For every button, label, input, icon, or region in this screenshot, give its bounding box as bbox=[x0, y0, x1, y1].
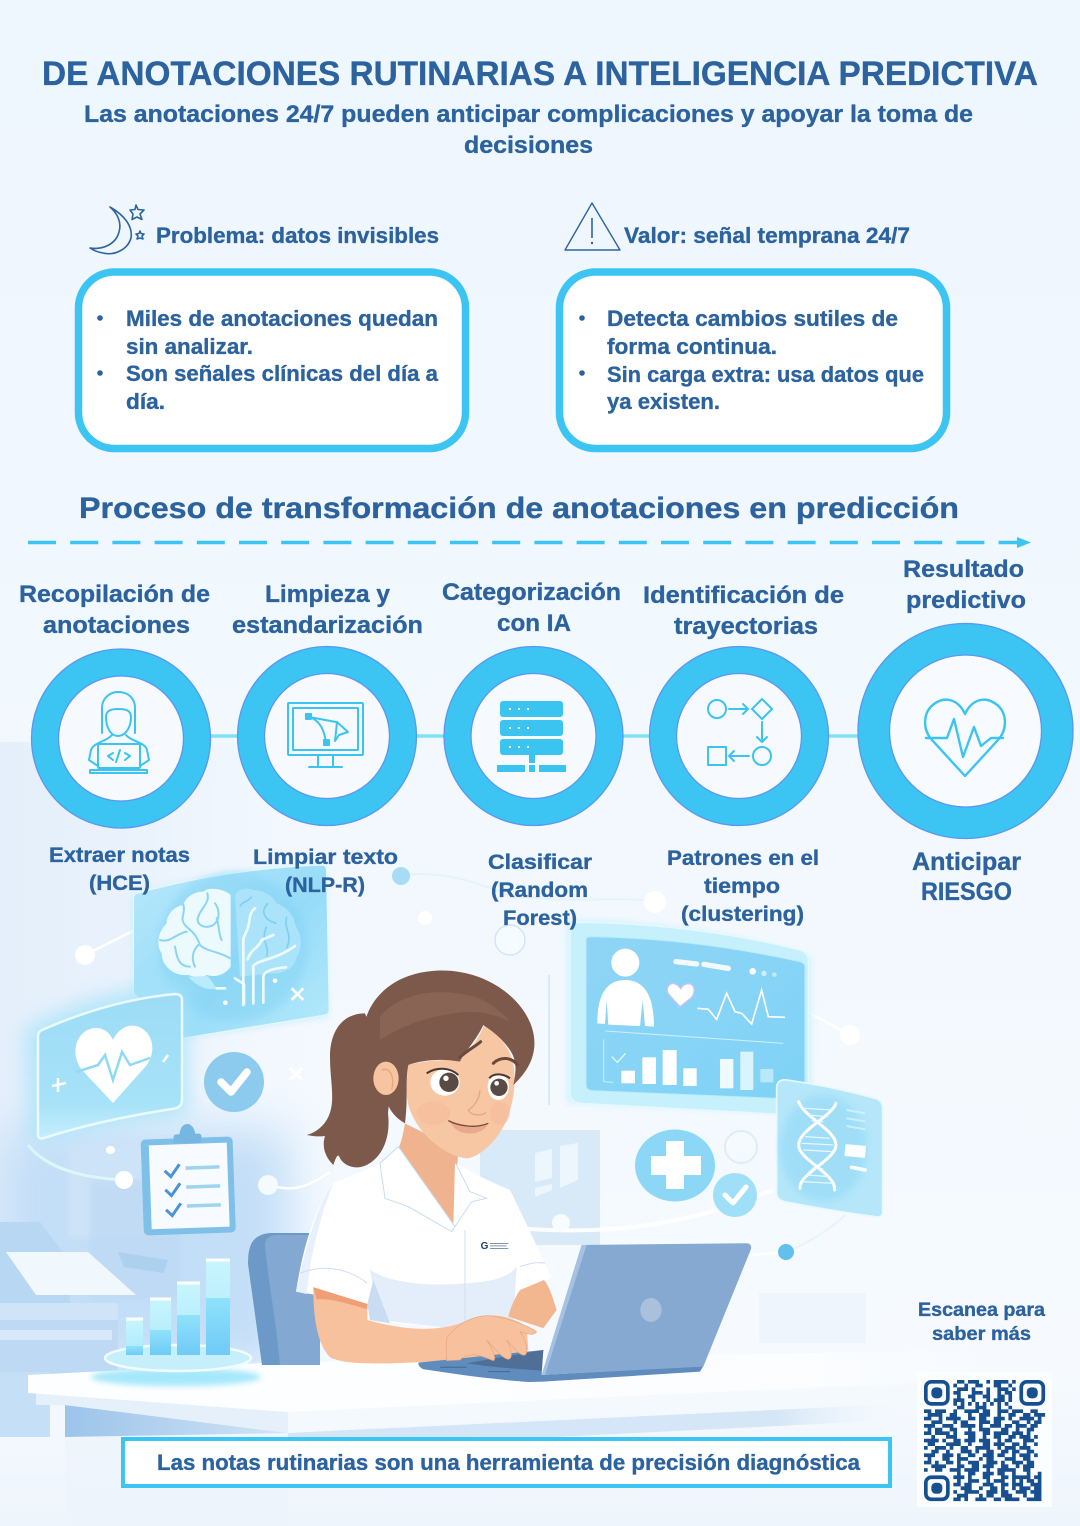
panel: valor: ya existen. bbox=[607, 389, 720, 414]
step 5: resultado predictivo bbox=[858, 556, 1073, 838]
panel: problema bbox=[78, 272, 466, 448]
illustration: DNA panel bbox=[777, 1080, 883, 1217]
icon: check badge bbox=[204, 1052, 264, 1112]
step 3: categorización: Categorización bbox=[442, 579, 621, 606]
subtitle: decisiones bbox=[464, 132, 593, 159]
illustration: dashboard panel bbox=[567, 920, 812, 1115]
step 1: recopilación: anotaciones bbox=[43, 612, 190, 639]
panel: valor: Detecta cambios sutiles de bbox=[607, 306, 898, 331]
qr caption: Escanea para bbox=[918, 1300, 1045, 1321]
illustration: brain panel bbox=[132, 865, 329, 1038]
step 1: recopilación bbox=[19, 581, 210, 828]
icon: moon and stars bbox=[90, 205, 144, 254]
step 3 caption: Clasificar bbox=[488, 851, 592, 874]
step 2: limpieza: estandarización bbox=[232, 612, 423, 639]
step 5: resultado predictivo: predictivo bbox=[906, 587, 1026, 614]
illustration: 3D bar chart bbox=[105, 1259, 251, 1371]
arrow: process timeline bbox=[28, 537, 1031, 548]
illustration: heart panel bbox=[25, 985, 188, 1145]
step 1 caption: (HCE) bbox=[89, 872, 150, 895]
qr caption bbox=[918, 1300, 1045, 1345]
qr caption: saber más bbox=[932, 1324, 1031, 1345]
process connector line bbox=[205, 734, 870, 738]
step 2 caption: (NLP-R) bbox=[285, 874, 365, 897]
panel: problema: Miles de anotaciones quedan bbox=[126, 306, 438, 331]
illustration: nurse at laptop bbox=[296, 971, 751, 1382]
subtitle bbox=[84, 101, 973, 159]
icon: warning triangle bbox=[565, 203, 620, 250]
bottom banner: Las notas rutinarias son una herramienta de precisión diagnóstica bbox=[157, 1450, 861, 1475]
panel: valor: forma continua. bbox=[607, 334, 777, 359]
icon: medical cross bbox=[635, 1130, 715, 1202]
panel: problema: día. bbox=[126, 389, 165, 414]
subtitle: Las anotaciones 24/7 pueden anticipar complicaciones y apoyar la toma de bbox=[84, 101, 973, 128]
illustration: nurse at laptop: G bbox=[481, 1241, 489, 1252]
step 4: identificación: trayectorias bbox=[674, 613, 818, 640]
step 4: identificación: Identificación de bbox=[643, 582, 844, 609]
step 1 caption bbox=[49, 844, 190, 895]
panel: valor: Sin carga extra: usa datos que bbox=[607, 362, 924, 387]
step 5 caption: RIESGO bbox=[921, 878, 1012, 906]
step 1 caption: Extraer notas bbox=[49, 844, 190, 867]
background scene: hospital room bbox=[0, 742, 866, 1437]
panel: problema: sin analizar. bbox=[126, 334, 253, 359]
step 5: resultado predictivo: Resultado bbox=[903, 556, 1024, 583]
step 4 caption: tiempo bbox=[704, 875, 780, 898]
title: DE ANOTACIONES RUTINARIAS A INTELIGENCIA PREDICTIVA bbox=[42, 55, 1038, 93]
icon: small check bbox=[713, 1131, 757, 1217]
step 4: identificación bbox=[643, 582, 844, 826]
step 4 caption: (clustering) bbox=[681, 903, 804, 926]
step 2 caption: Limpiar texto bbox=[253, 846, 398, 869]
step 4 caption: Patrones en el bbox=[667, 847, 819, 870]
step 5 caption bbox=[912, 848, 1021, 906]
step 3 caption: Forest) bbox=[503, 907, 577, 930]
step 3 caption: (Random bbox=[491, 879, 588, 902]
step 4 caption bbox=[667, 847, 819, 926]
step 5 caption: Anticipar bbox=[912, 848, 1021, 876]
panel: problema: Son señales clínicas del día a bbox=[126, 361, 439, 386]
illustration: chair bbox=[248, 1233, 320, 1365]
step 2 caption bbox=[253, 846, 398, 897]
step 3: categorización: con IA bbox=[497, 610, 571, 637]
desk bbox=[28, 1348, 1080, 1526]
section heading: proceso: Proceso de transformación de anotaciones en predicción bbox=[79, 492, 959, 525]
step 3 caption bbox=[488, 851, 592, 930]
step 1: recopilación: Recopilación de bbox=[19, 581, 210, 608]
heading: valor: Valor: señal temprana 24/7 bbox=[624, 223, 910, 248]
step 2: limpieza bbox=[232, 581, 423, 826]
heading: problema: Problema: datos invisibles bbox=[156, 223, 439, 248]
step 3: categorización bbox=[442, 579, 623, 826]
bottom banner bbox=[123, 1439, 890, 1486]
QR code bbox=[917, 1372, 1052, 1507]
panel: valor bbox=[560, 272, 946, 448]
step 2: limpieza: Limpieza y bbox=[265, 581, 391, 608]
illustration: clipboard bbox=[140, 1122, 236, 1236]
